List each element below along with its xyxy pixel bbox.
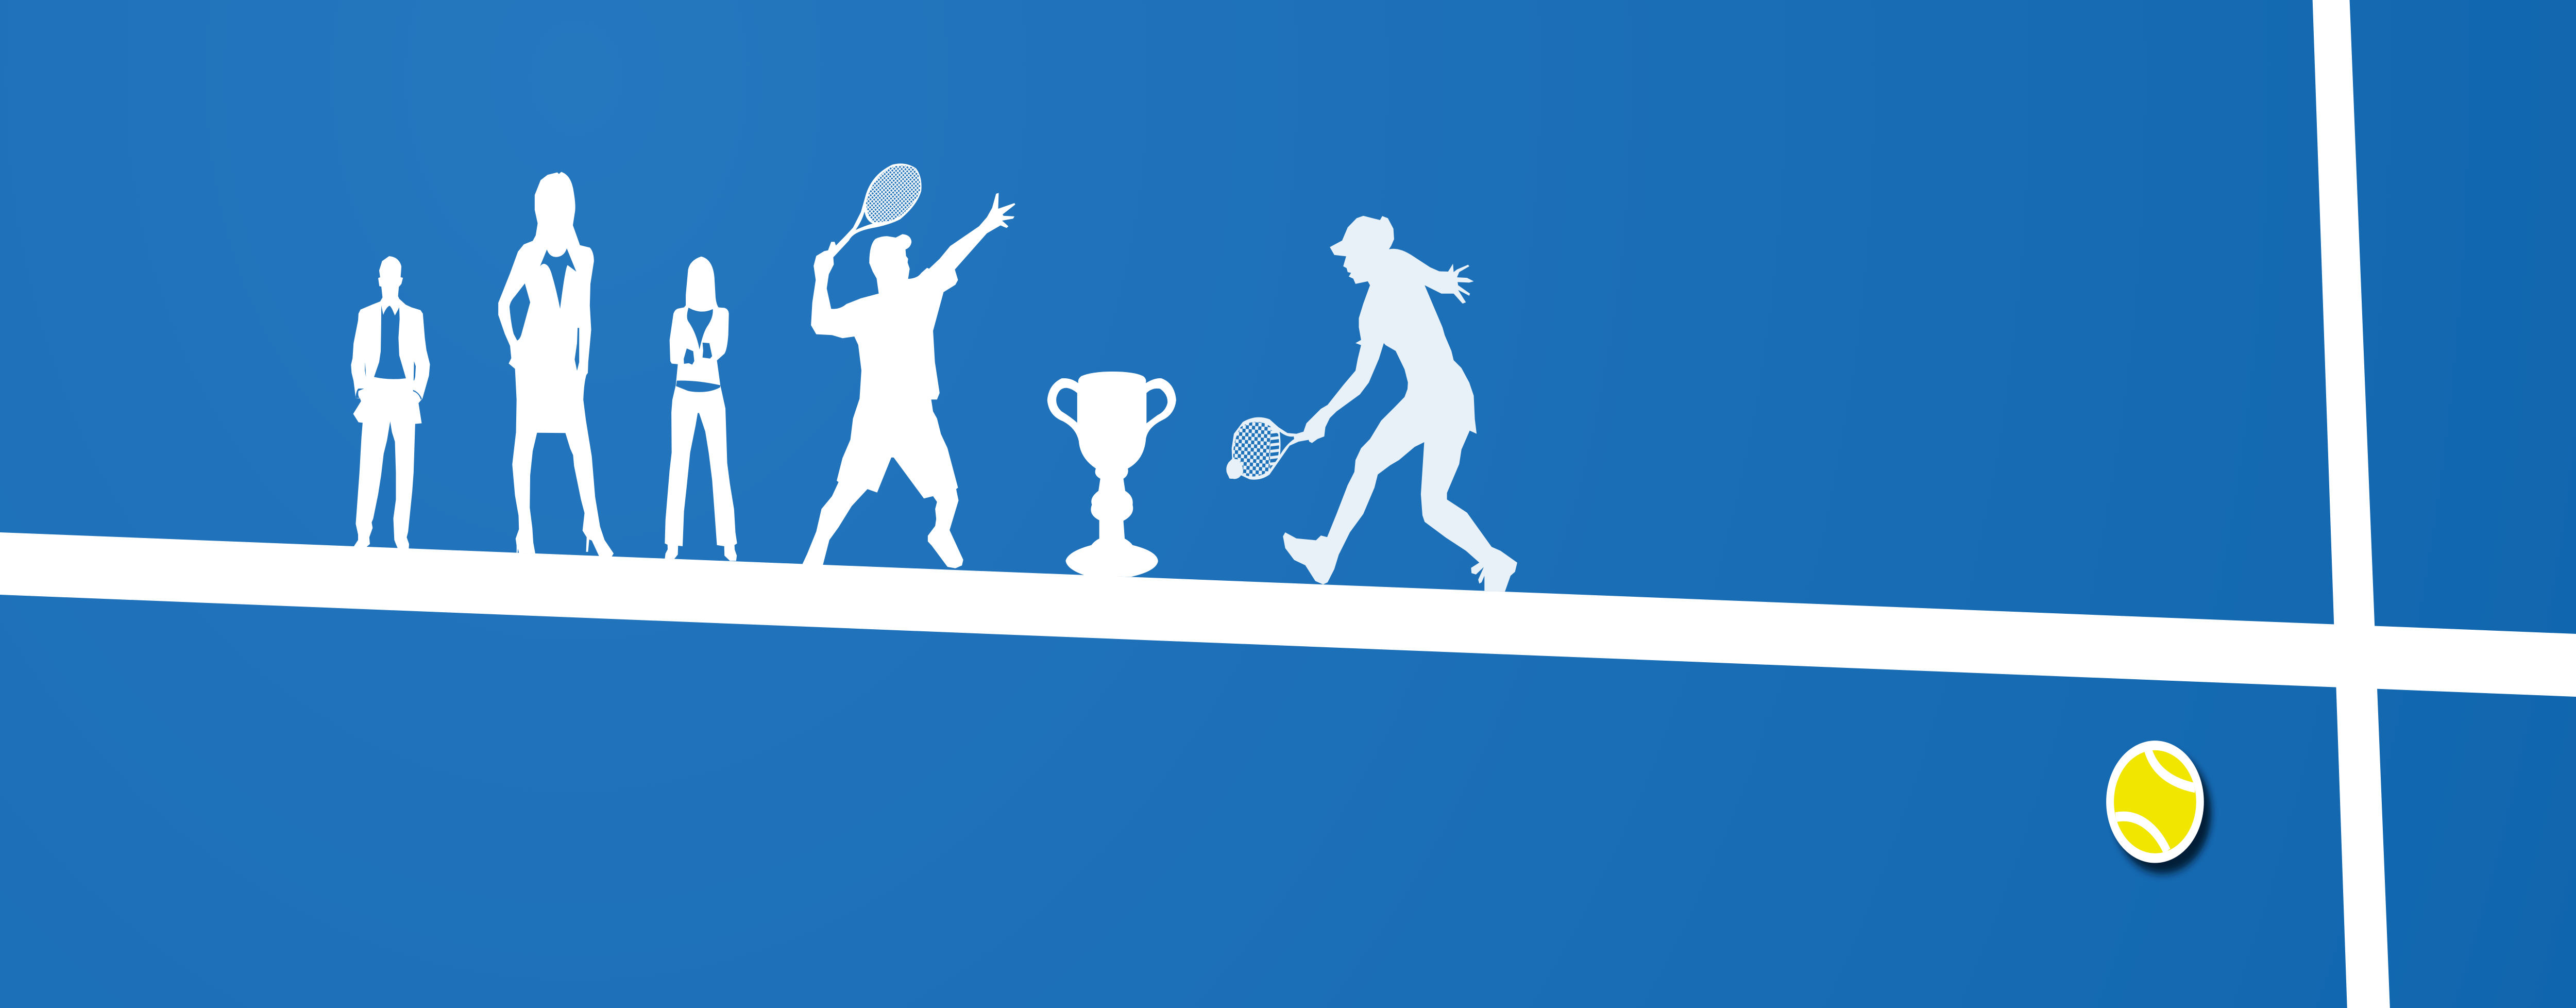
figure: male tennis player serving bbox=[802, 163, 1015, 568]
trophy bbox=[1047, 372, 1176, 577]
ball on racket bbox=[1226, 460, 1243, 479]
figure: female tennis player with forehand bbox=[1226, 216, 1517, 592]
racket strings bbox=[1233, 422, 1270, 477]
figure: man in suit bbox=[351, 256, 430, 549]
racket side strings bbox=[1270, 430, 1279, 469]
racket strings bbox=[866, 165, 920, 222]
tennis ball bbox=[2106, 741, 2211, 873]
court line: vertical sideline bbox=[2313, 0, 2390, 1008]
figure: woman in skirt suit bbox=[498, 172, 614, 557]
court line: horizontal baseline bbox=[0, 532, 2576, 697]
figure: woman with folded arms bbox=[665, 257, 737, 561]
